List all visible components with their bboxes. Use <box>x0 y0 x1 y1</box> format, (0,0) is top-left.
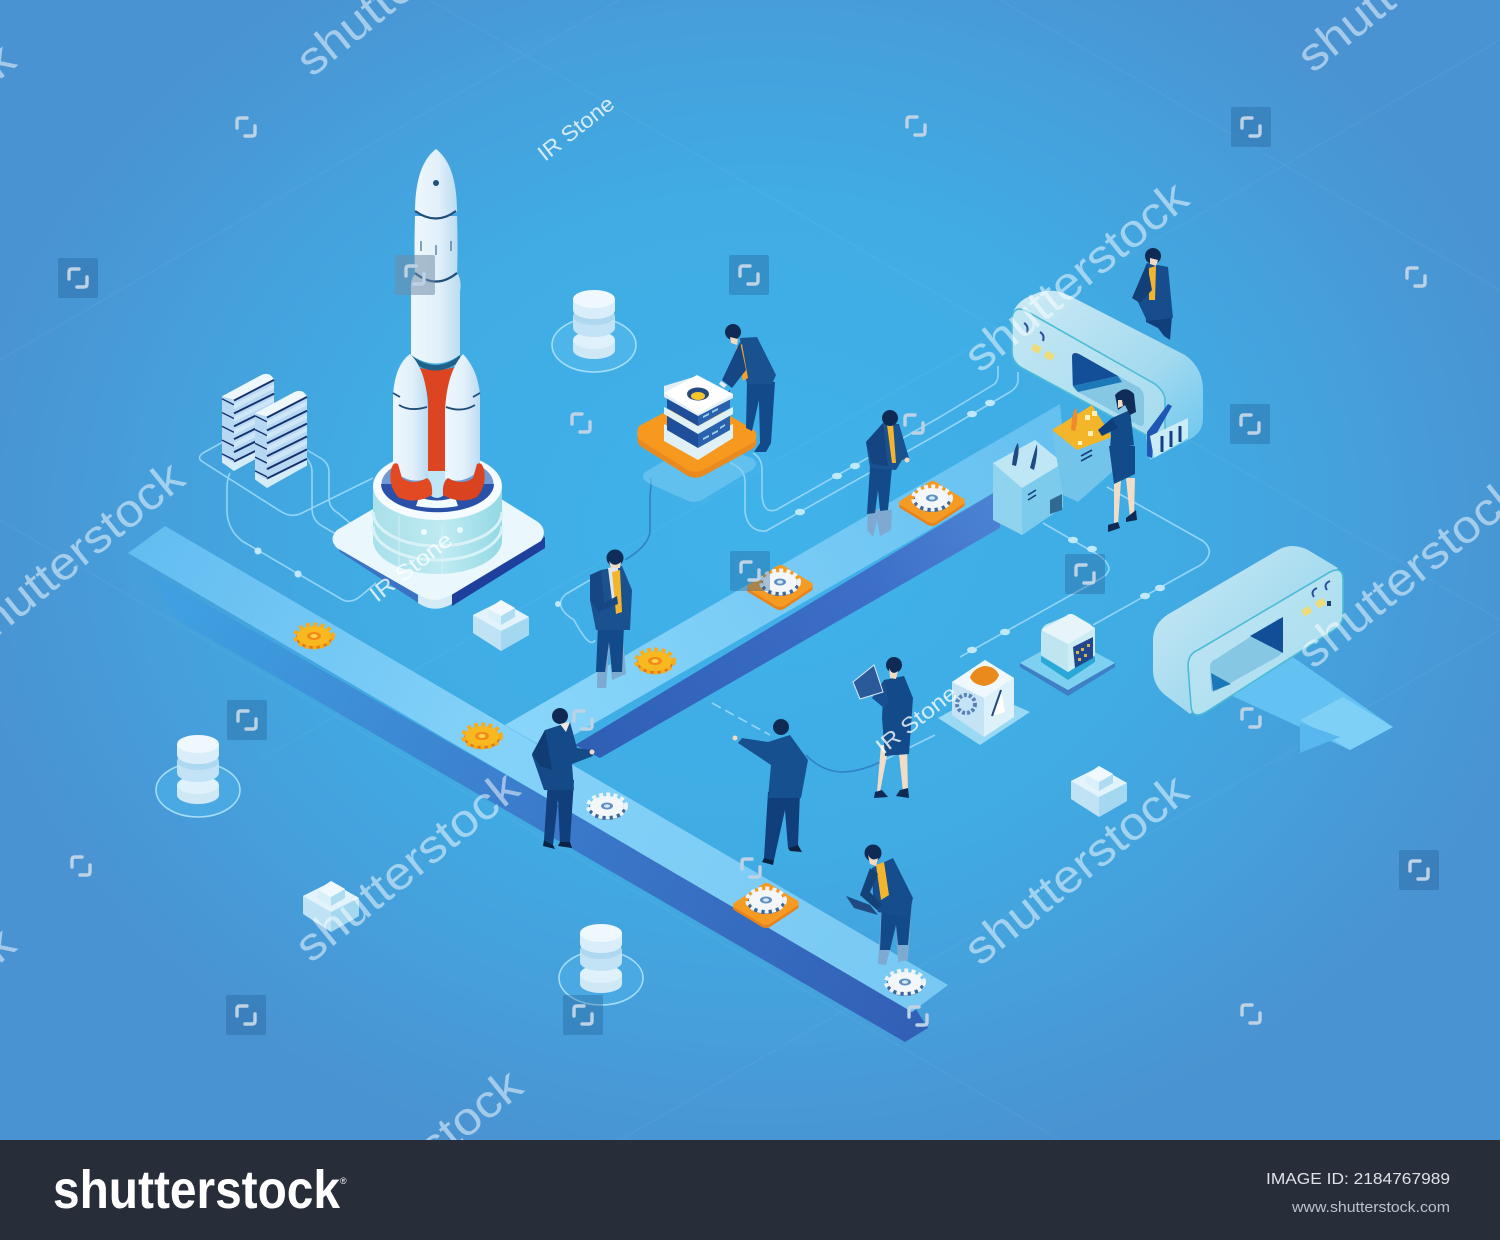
rocket: nozzles <box>390 463 432 501</box>
gear: gold 2 <box>463 724 501 749</box>
footer registered mark: ® <box>340 1176 347 1186</box>
unit lower block <box>664 424 733 460</box>
person: pointing back view <box>732 719 808 865</box>
footer bar <box>0 1140 1500 1240</box>
person: pointing on belt <box>532 708 594 849</box>
machine 1: opening <box>1072 353 1144 426</box>
machine 2: controls <box>1301 598 1326 616</box>
database icon: bottom <box>559 924 643 1005</box>
rocket: core stage <box>411 274 461 364</box>
shutterstock watermark text: shutterstock <box>954 763 1199 975</box>
chip box on pad <box>1020 614 1115 696</box>
footer logo: shutterstock <box>53 1160 341 1220</box>
shutterstock watermark text: shutterstock <box>285 760 530 972</box>
rocket: nose <box>415 149 457 219</box>
gear pad 2 <box>747 565 813 610</box>
gear: white plain 1 <box>588 794 626 820</box>
person: bending over central server <box>719 324 776 452</box>
lego block icons <box>303 600 1127 932</box>
rocket: left booster <box>393 354 428 481</box>
person: with notebook, top belt <box>590 550 632 688</box>
gears on belts <box>295 481 965 996</box>
gear: white plain 2 <box>886 970 924 996</box>
machine 2: back shell <box>1153 546 1338 714</box>
block: right <box>1071 766 1127 817</box>
machine 1: controls <box>1031 343 1055 361</box>
machine 1: back shell <box>1012 291 1203 460</box>
yellow control panel <box>1052 405 1112 502</box>
server stacks <box>222 374 307 488</box>
machine 2 <box>1153 546 1343 715</box>
watermark stamp squares <box>58 107 1439 1035</box>
database icon: left <box>156 735 240 817</box>
machine 1: vents <box>1147 404 1172 458</box>
IR Stone watermark text: IR Stone <box>533 91 619 166</box>
launch ring <box>373 452 502 574</box>
cube: warning face <box>992 690 1005 716</box>
control box with levers <box>993 405 1112 535</box>
watermark stamp brackets <box>69 117 1428 1025</box>
rocket launch pad <box>332 452 545 609</box>
person: behind machine <box>1132 248 1173 340</box>
machine 1 <box>1012 291 1203 460</box>
cube: orange puzzle gear <box>970 666 999 686</box>
rocket: red core <box>406 364 476 471</box>
unit upper block <box>664 407 733 434</box>
gear: gold 3 <box>636 650 674 674</box>
conveyor belt: branch <box>505 404 1065 758</box>
gear: gold 1 <box>295 624 333 649</box>
gear pad 1 <box>899 481 965 526</box>
cube: gear face <box>957 695 975 713</box>
rocket: right booster <box>445 354 480 481</box>
settings cube on pad <box>938 660 1030 745</box>
person: standing looking down <box>866 410 910 537</box>
block: lower left <box>303 881 359 932</box>
database icon: top centre <box>552 290 636 372</box>
shutterstock watermark text: shutterstock <box>954 170 1199 382</box>
IR Stone watermark text: IR Stone <box>365 527 457 607</box>
machine 1: front face <box>1012 309 1165 438</box>
IR Stone watermark text: IR Stone <box>871 680 962 759</box>
gear pad 3 <box>733 883 799 928</box>
central server unit <box>637 375 756 502</box>
person: with tablet on belt <box>846 844 913 965</box>
machine 2: front face <box>1188 570 1343 715</box>
footer url: www.shutterstock.com <box>1291 1200 1450 1216</box>
block: near rocket <box>473 600 529 651</box>
IR Stone watermark text <box>365 91 962 759</box>
machine 2: opening <box>1210 618 1283 692</box>
conveyor belt: main <box>128 526 948 1042</box>
circuit lines <box>200 366 1209 762</box>
footer image id: IMAGE ID: 2184767989 <box>1266 1171 1450 1188</box>
conveyor belt: exit strip <box>1230 655 1393 753</box>
person: woman with laptop <box>853 657 913 798</box>
rocket <box>390 149 485 501</box>
person: woman at control panel <box>1098 389 1137 532</box>
